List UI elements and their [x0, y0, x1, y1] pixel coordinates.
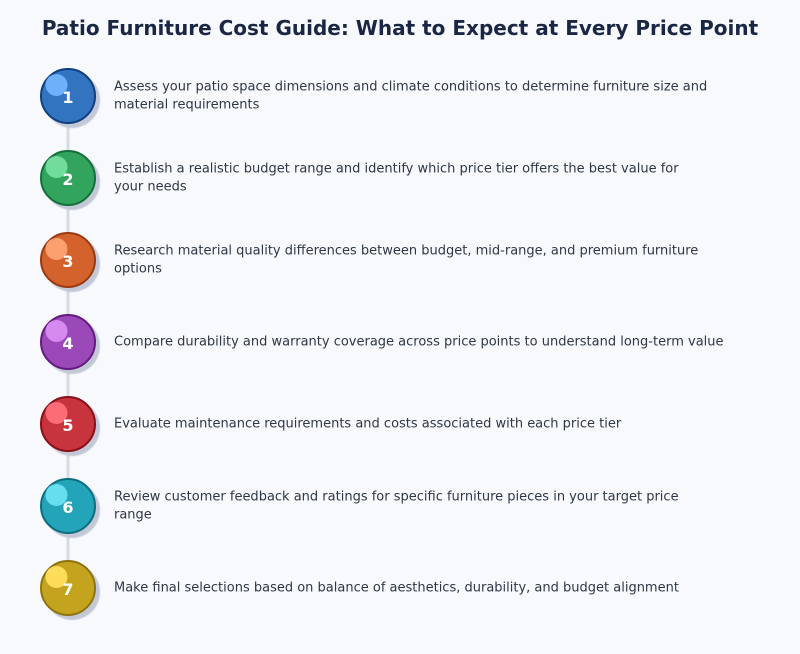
step 3: Research material quality differences between budget, mid-range, and premium furniture	[114, 244, 698, 258]
step 6: range	[114, 508, 152, 522]
step 4	[41, 315, 724, 374]
step 1	[41, 69, 707, 128]
step 4: 4	[62, 334, 74, 353]
step 2: 2	[62, 170, 74, 189]
step 2: your needs	[114, 180, 187, 194]
step 1: 1	[62, 88, 74, 107]
step 5: 5	[62, 416, 74, 435]
step 1: material requirements	[114, 98, 260, 112]
step 3: 3	[62, 252, 74, 271]
step 1: Assess your patio space dimensions and climate conditions to determine furniture size and	[114, 80, 707, 94]
step 7: 7	[62, 580, 74, 599]
step 2: Establish a realistic budget range and identify which price tier offers the best value for	[114, 162, 679, 176]
title: Patio Furniture Cost Guide: What to Expect at Every Price Point	[42, 16, 759, 40]
step 6	[41, 479, 679, 538]
step 7: Make final selections based on balance of aesthetics, durability, and budget alignment	[114, 580, 679, 596]
step 3	[41, 233, 698, 292]
step 3: options	[114, 262, 162, 276]
step 2	[41, 151, 679, 210]
step 4: Compare durability and warranty coverage across price points to understand long-term value	[114, 334, 724, 350]
step 5: Evaluate maintenance requirements and costs associated with each price tier	[114, 416, 622, 432]
step 5	[41, 397, 622, 456]
step 6: Review customer feedback and ratings for specific furniture pieces in your target price	[114, 490, 679, 504]
step 6: 6	[62, 498, 74, 517]
step 7	[41, 561, 679, 620]
